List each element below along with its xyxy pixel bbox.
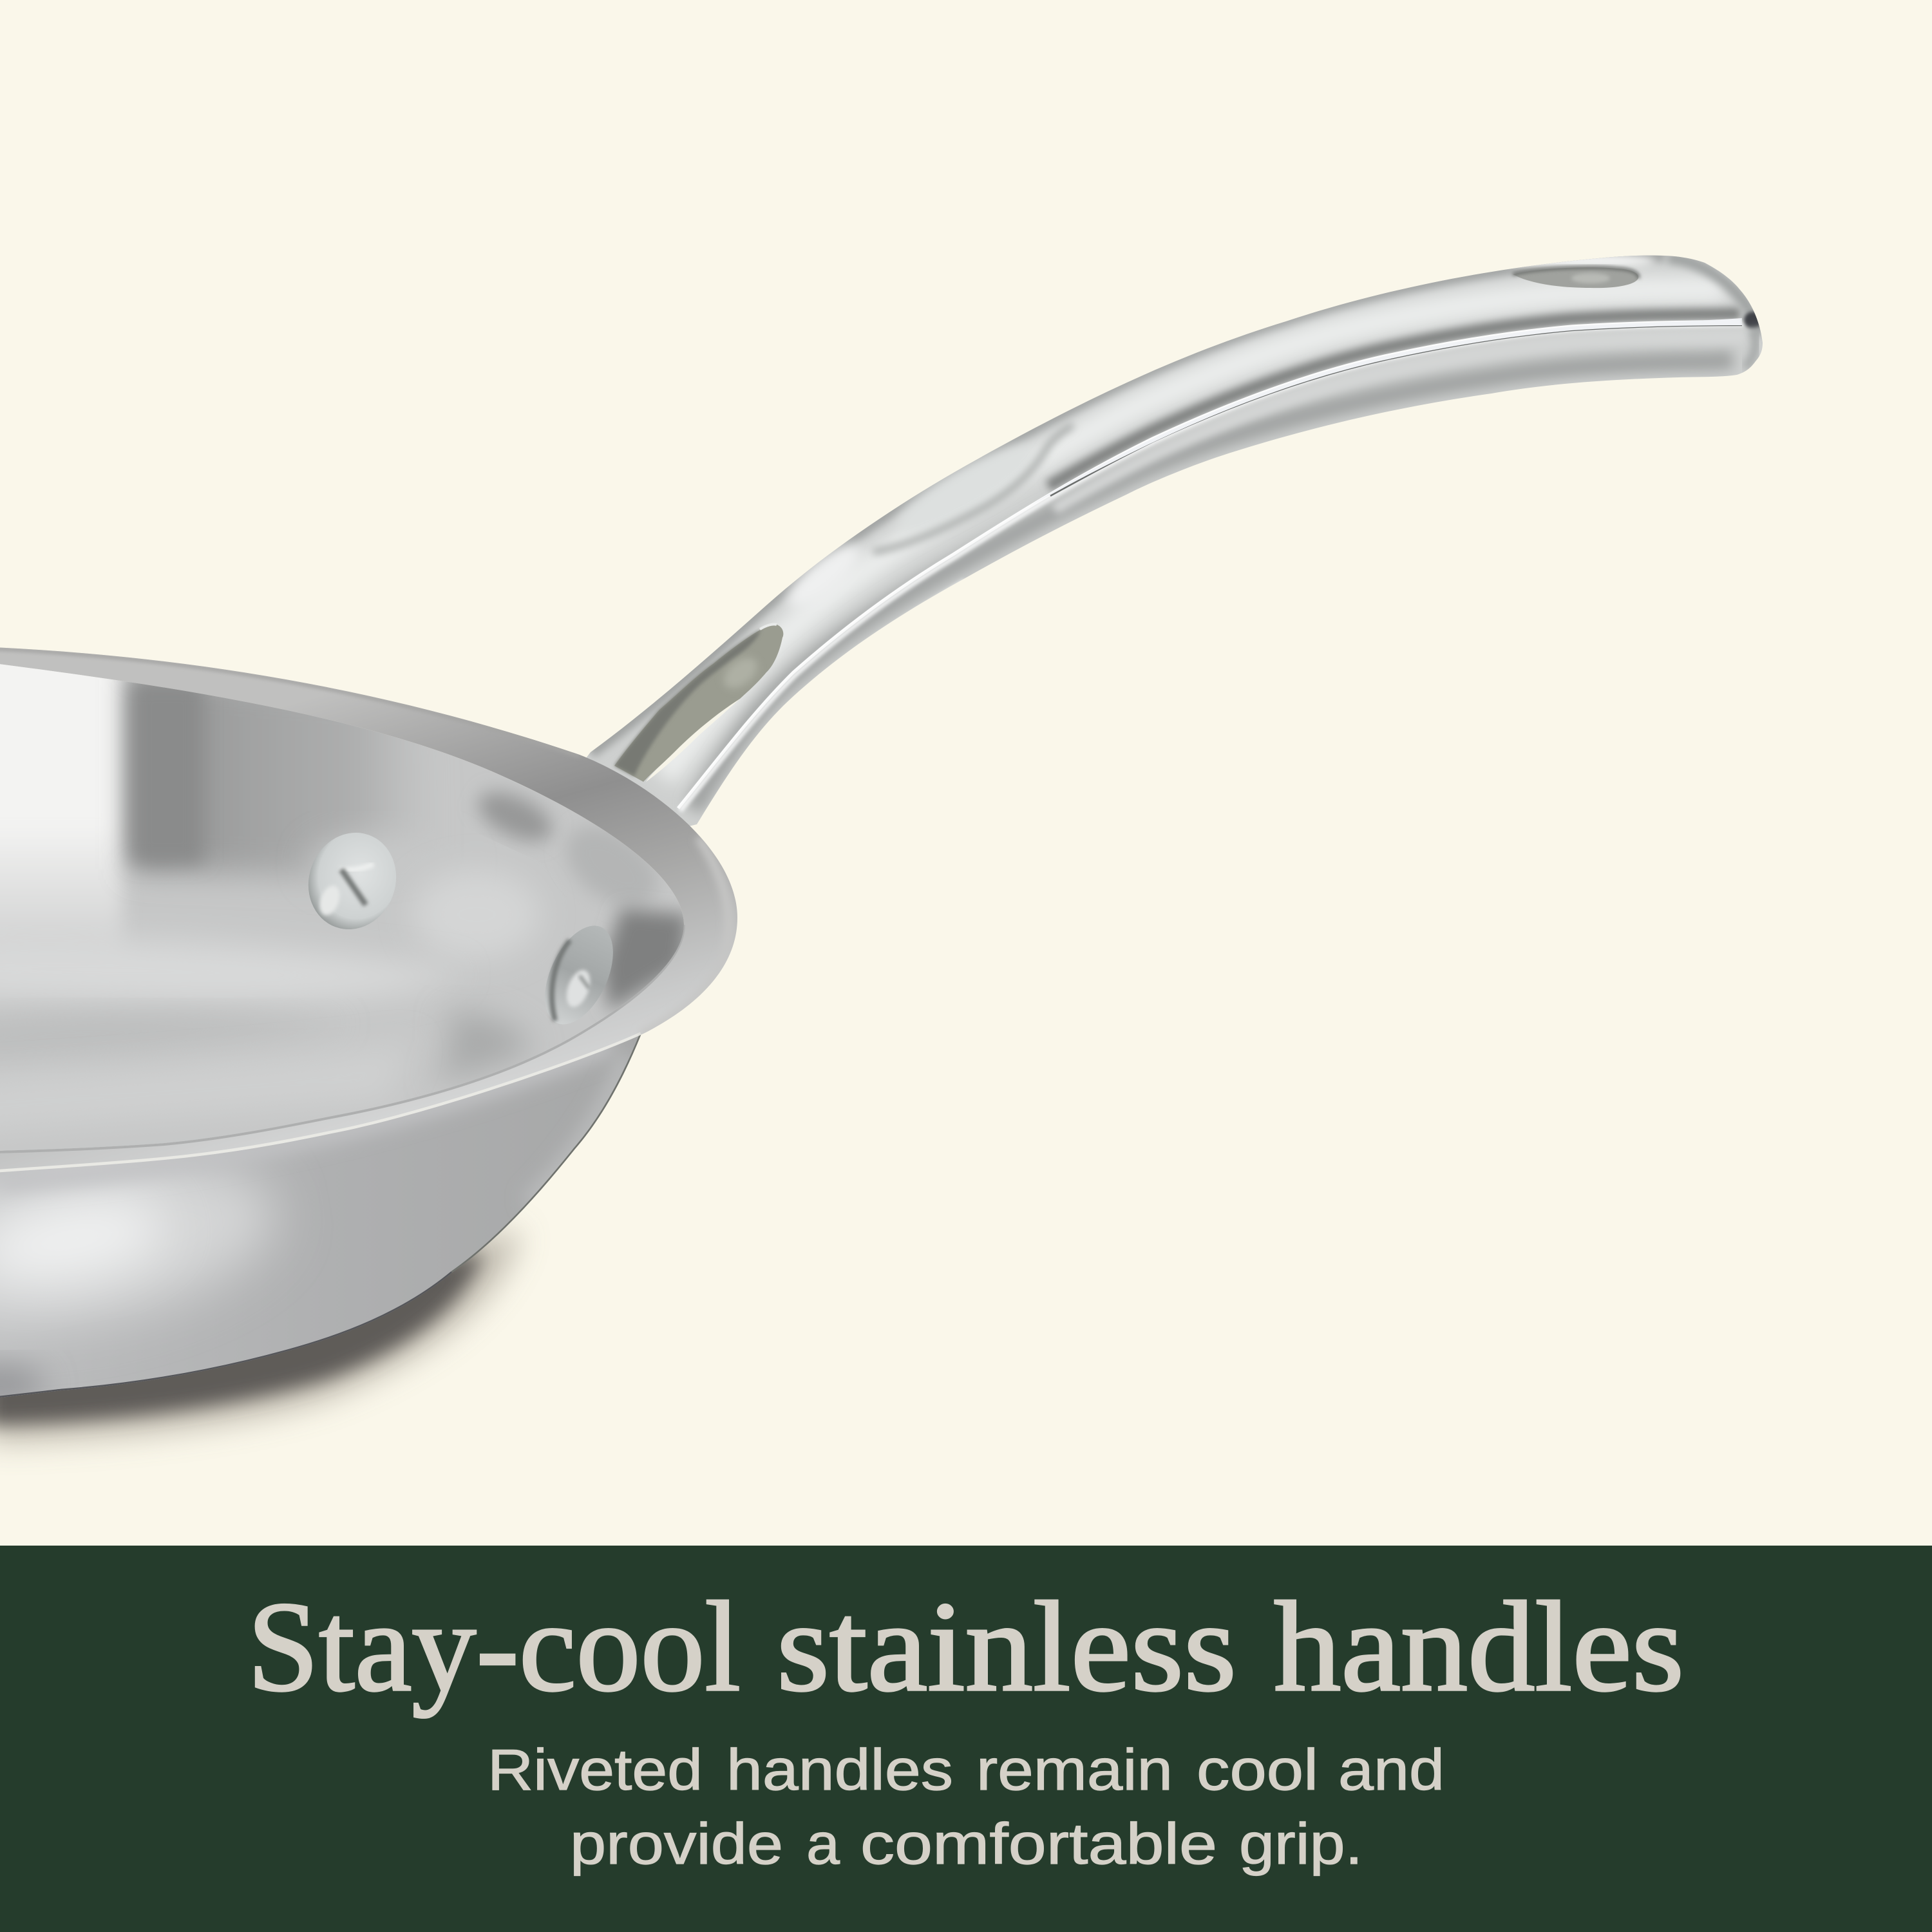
description (488, 1738, 1444, 1877)
handle end hole (1501, 253, 1655, 288)
handle bright band (663, 289, 1727, 776)
pan interior (0, 618, 689, 1151)
description: handles (726, 1738, 953, 1803)
handle ridge white highlight (678, 321, 1742, 808)
rim top dark edge (0, 649, 580, 756)
body outline right (452, 1024, 645, 1273)
description: cool (1197, 1738, 1318, 1803)
background (0, 0, 1932, 1546)
description: and (1338, 1738, 1444, 1803)
rivet right (531, 915, 627, 1035)
lower dark wedge (431, 1013, 535, 1082)
bright reflection upper left (0, 618, 122, 992)
description: a (806, 1812, 840, 1877)
handle ridge tapered band (1030, 318, 1742, 506)
body lower left dark (0, 1365, 45, 1404)
handle lower edge bright near pan (933, 578, 963, 596)
handle ridge dark rule (1050, 325, 1742, 496)
handle tip end shading (1668, 258, 1762, 368)
description: provide (570, 1812, 783, 1877)
dark reflection band (132, 670, 444, 876)
body right light strip (528, 1056, 628, 1204)
pan body exterior (0, 1024, 645, 1404)
description: comfortable (860, 1812, 1217, 1877)
handle upper edge shading (591, 256, 1665, 752)
light streak center (0, 938, 464, 1002)
dark patch near upper rim (471, 782, 560, 851)
pan cast shadow (0, 1230, 522, 1443)
rim right light edge (641, 837, 729, 1035)
handle shadow above ridge (1048, 314, 1740, 486)
description: Riveted (488, 1738, 703, 1803)
description: remain (976, 1738, 1173, 1803)
headline: Stay-cool (247, 1576, 741, 1718)
rivet left (295, 820, 410, 942)
body broad highlight (0, 1133, 287, 1352)
body bottom outline (0, 1273, 452, 1398)
right wall mid tone (551, 810, 672, 922)
bottom banner (0, 1546, 1932, 1932)
handle (580, 253, 1763, 837)
body core highlight (0, 1185, 173, 1294)
pan rim (0, 647, 737, 1173)
headline: stainless (777, 1576, 1236, 1718)
rim inner border (0, 925, 684, 1152)
headline: handles (1274, 1576, 1684, 1718)
pale patch between rivets (412, 869, 541, 960)
rim lower pale edge (0, 1034, 641, 1171)
lower pale floor (0, 1043, 412, 1133)
darker swirl (0, 1014, 348, 1056)
headline (247, 1576, 1684, 1718)
right wall dark (602, 908, 689, 1011)
handle lower light strip (1051, 387, 1337, 515)
handle slot (614, 624, 783, 782)
body top light band (0, 1043, 612, 1182)
description: grip. (1239, 1812, 1363, 1877)
handle lower shading (693, 359, 1733, 809)
rivet dimple on handle (779, 425, 1073, 618)
